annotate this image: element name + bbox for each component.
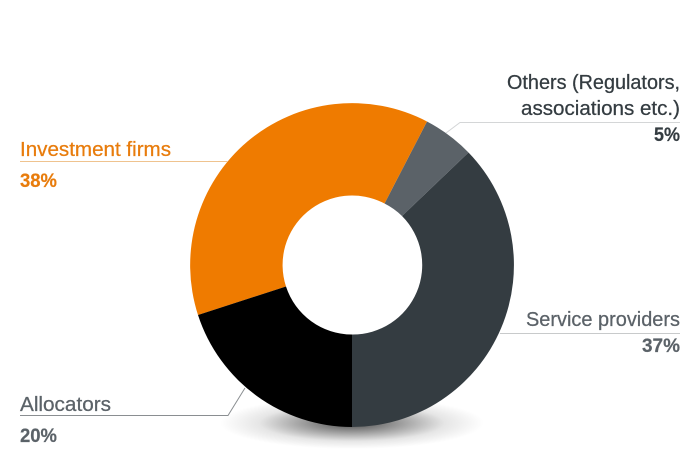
label: service providers — [500, 309, 680, 357]
label: investment firms — [20, 139, 228, 192]
label: allocators: 20% — [20, 425, 57, 447]
label: allocators: Allocators — [20, 394, 111, 416]
label: investment firms: Investment firms — [20, 139, 171, 161]
label: others: 5% — [654, 124, 680, 146]
donut chart — [190, 103, 514, 427]
donut drop shadow — [220, 397, 484, 449]
segment: allocators 20% — [198, 286, 352, 427]
label: others: Others (Regulators, — [507, 72, 680, 94]
label: others: associations etc.) — [521, 98, 680, 120]
label: service providers: Service providers — [526, 309, 680, 331]
label: others — [446, 72, 680, 146]
segment: service providers 37% — [352, 152, 514, 427]
label: allocators — [20, 388, 245, 447]
label: investment firms: 38% — [20, 170, 57, 192]
label: service providers: 37% — [642, 335, 680, 357]
segment: others 5% — [384, 122, 468, 216]
segment: investment firms 38% — [190, 103, 427, 315]
